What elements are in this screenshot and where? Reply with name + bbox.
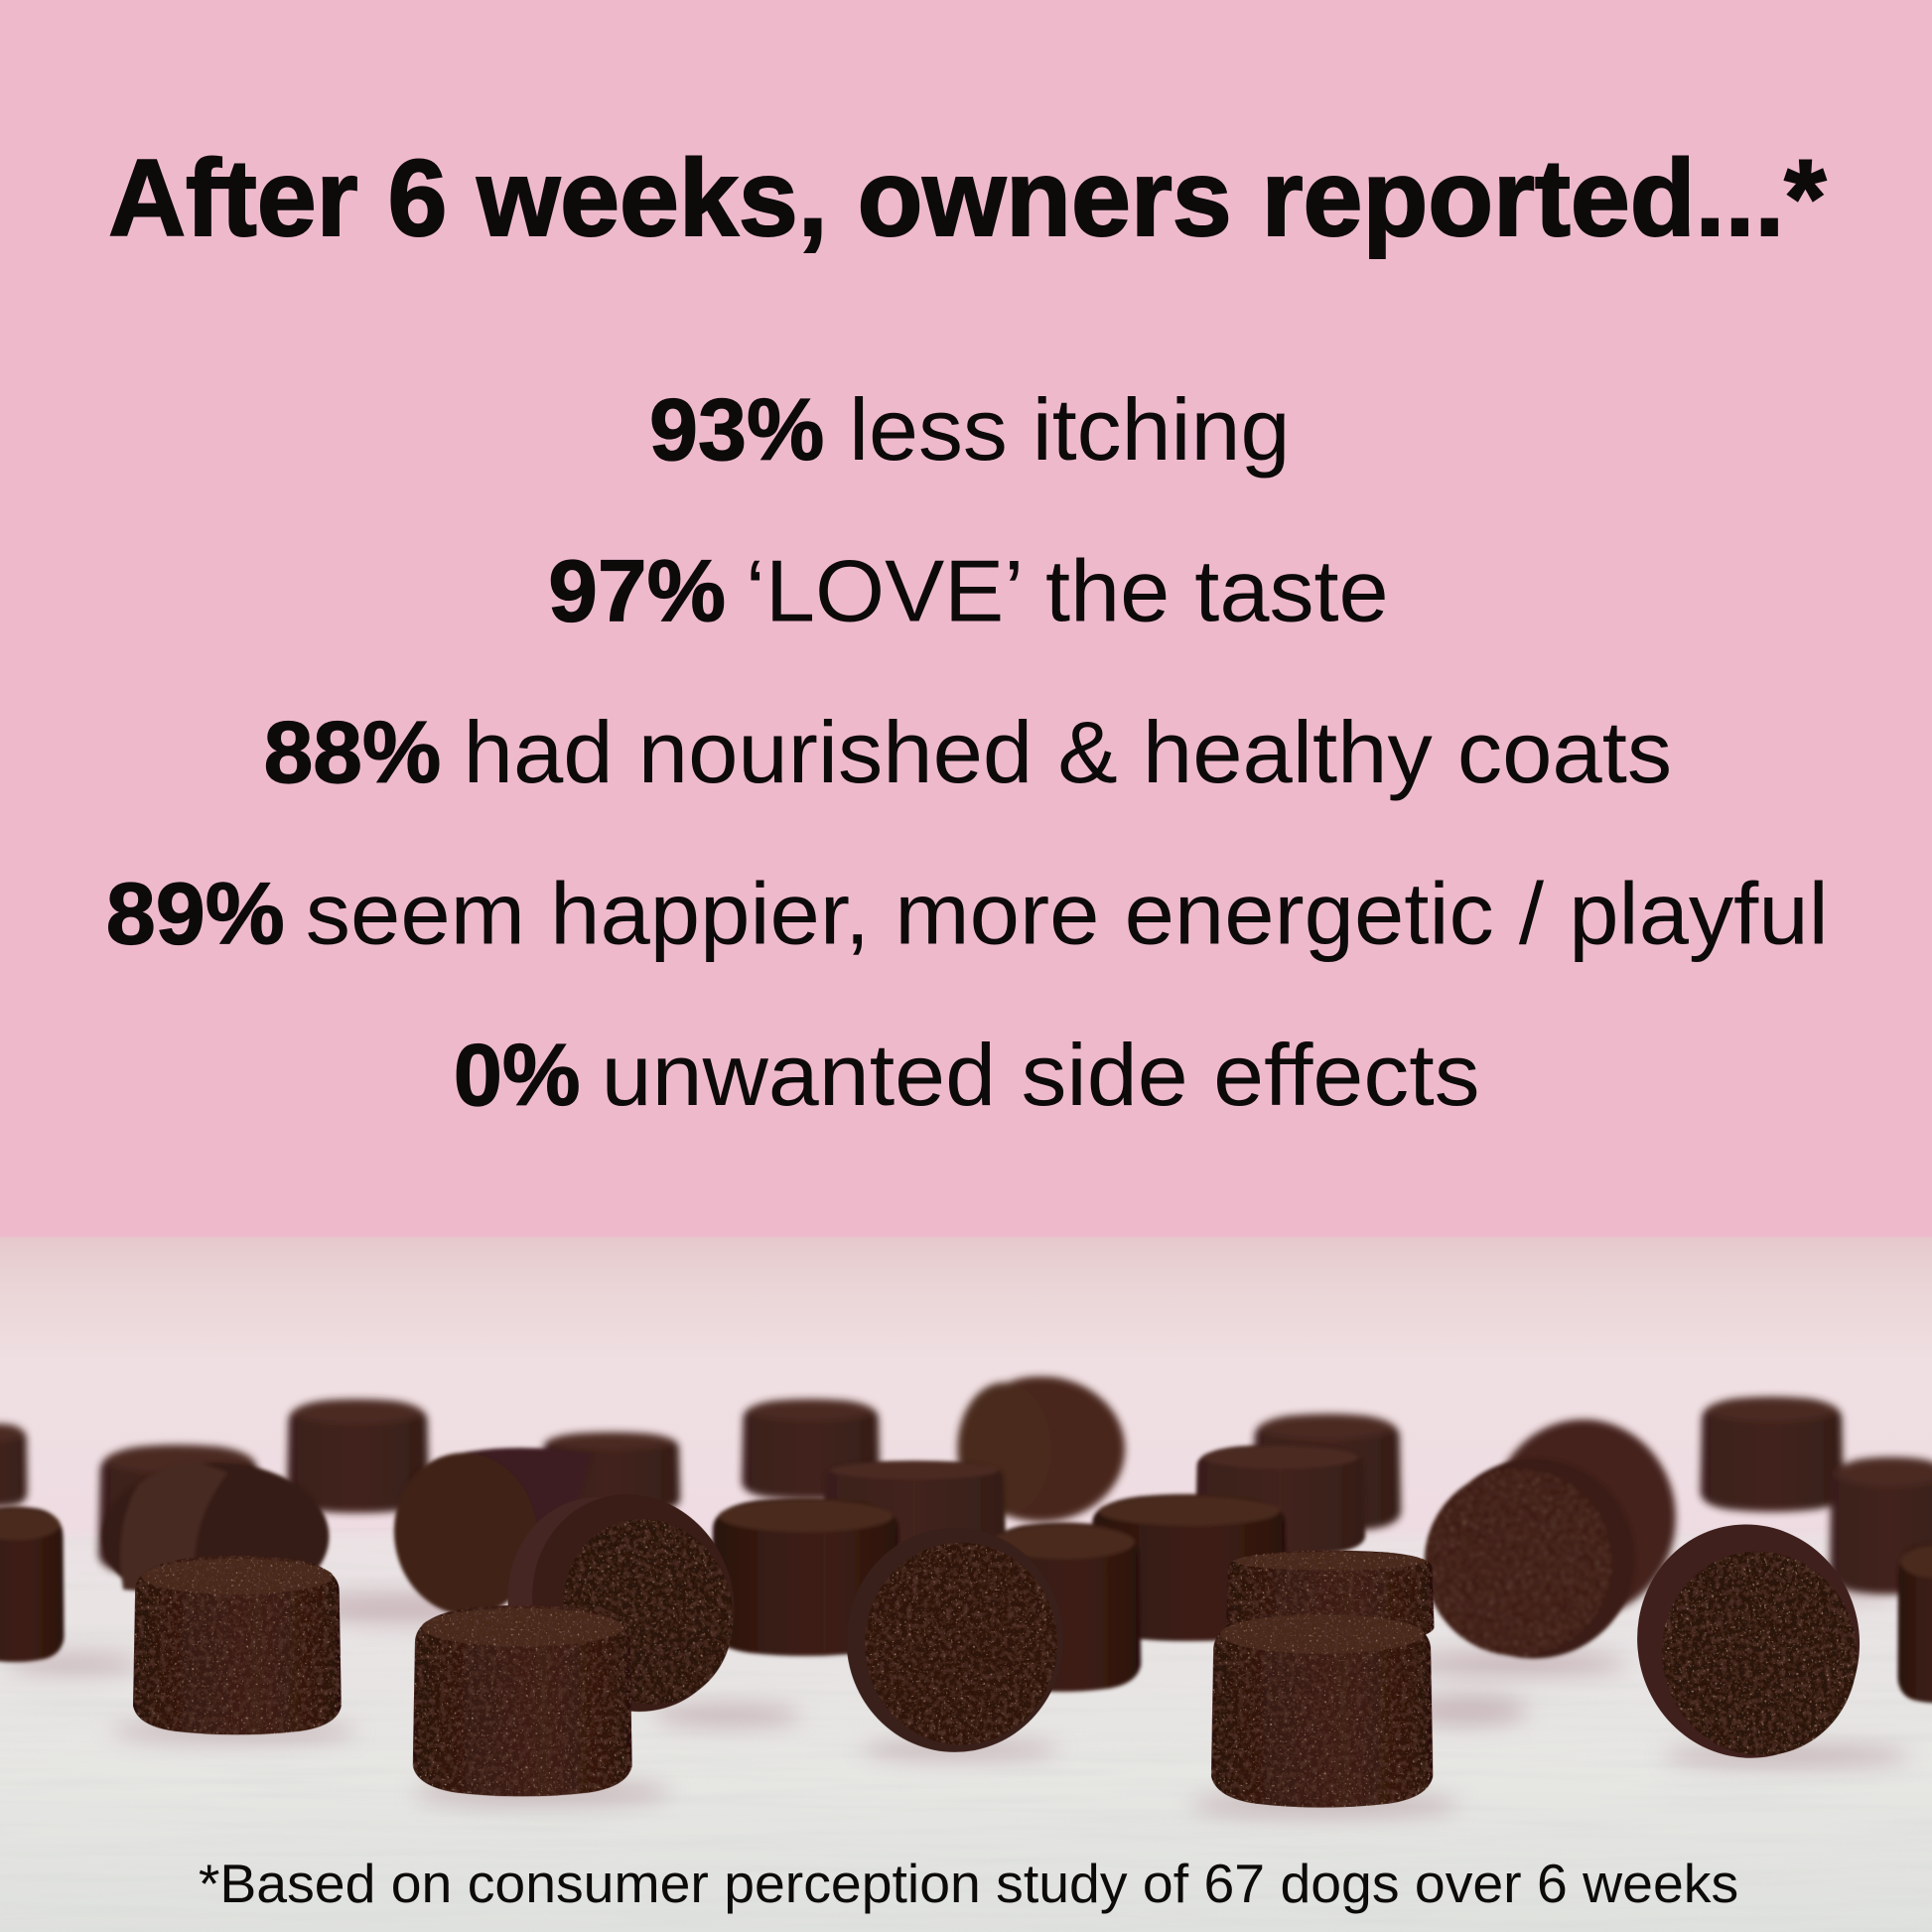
title: After 6 weeks, owners reported...* <box>108 138 1827 259</box>
middle row of treats <box>0 1444 1932 1703</box>
pink reflections and shadows on table <box>6 1580 1910 1818</box>
stat: 97% love the taste: 97% <box>548 541 726 639</box>
far row of treats <box>0 1376 1932 1616</box>
stat: 88% nourished coats: 88% <box>264 703 441 801</box>
footnote: *Based on consumer perception study of 67 dogs over 6 weeks <box>199 1854 1738 1914</box>
stat: 89% happier: seem happier, more energetic / playful <box>306 865 1829 963</box>
near row of treats <box>133 1465 1881 1808</box>
stat: 93% less itching: 93% <box>649 380 824 479</box>
table surface <box>0 1237 1932 1932</box>
product photo: treats on white table <box>0 1237 1932 1932</box>
stat: 93% less itching: less itching <box>849 380 1290 479</box>
stat: 93% less itching <box>649 380 1290 479</box>
stat: 0% side effects: 0% <box>454 1026 581 1124</box>
stat: 88% nourished coats: had nourished & healthy coats <box>464 703 1672 801</box>
stat: 89% happier: 89% <box>106 865 285 963</box>
wood grain <box>0 1528 1932 1932</box>
stat: 97% love the taste: ‘LOVE’ the taste <box>746 541 1389 639</box>
pink background panel <box>0 0 1932 1237</box>
stat: 0% side effects: unwanted side effects <box>602 1026 1480 1124</box>
